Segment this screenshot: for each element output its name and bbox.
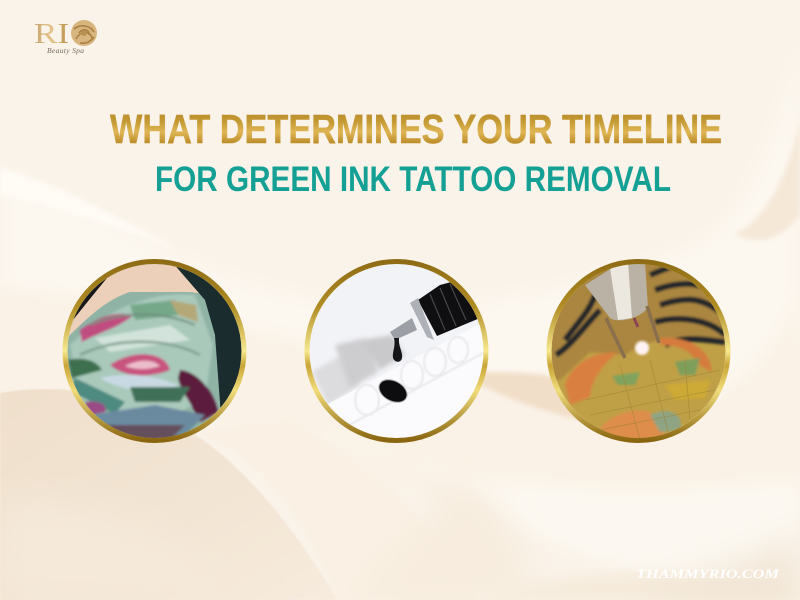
laser handpiece bbox=[585, 262, 648, 320]
ring bbox=[307, 262, 486, 440]
laser flash bbox=[635, 341, 649, 355]
icon: ink drop bbox=[393, 338, 402, 362]
heading: teal line: FOR GREEN INK TATTOO REMOVAL bbox=[155, 160, 671, 199]
logo: Rio Beauty Spa: RI bbox=[34, 18, 69, 50]
icon: ink pool bbox=[378, 379, 408, 403]
website watermark: THAMMYRIO.COM bbox=[636, 566, 780, 581]
logo: Rio Beauty Spa: Beauty Spa bbox=[47, 46, 84, 55]
logo: Rio Beauty Spa bbox=[34, 18, 97, 55]
photo: ink drop from bottle bbox=[300, 255, 495, 445]
ring bbox=[549, 262, 728, 440]
title bbox=[110, 106, 722, 199]
photo: laser on tattoo bbox=[545, 255, 735, 445]
icon: rose bbox=[71, 20, 97, 46]
photo: green tattoo on arm bbox=[60, 255, 250, 445]
icon: bottle bbox=[390, 281, 480, 340]
ring bbox=[65, 262, 244, 440]
